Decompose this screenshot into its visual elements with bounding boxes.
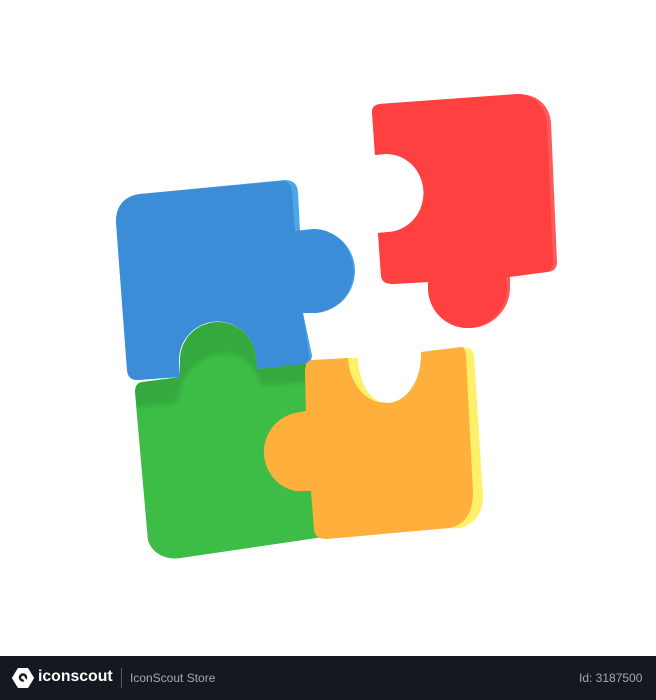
icon: iconscout logo: [12, 668, 34, 688]
brand name: iconscout: [38, 668, 113, 685]
footer bar: [0, 656, 656, 700]
puzzle illustration: [116, 94, 557, 558]
asset id: Id: 3187500: [579, 671, 642, 685]
red puzzle piece: [372, 94, 557, 328]
store link: IconScout Store: [130, 671, 215, 685]
orange puzzle piece: [264, 347, 483, 539]
blue puzzle piece: [116, 180, 355, 380]
divider: [121, 668, 122, 688]
green puzzle piece: [135, 322, 320, 558]
